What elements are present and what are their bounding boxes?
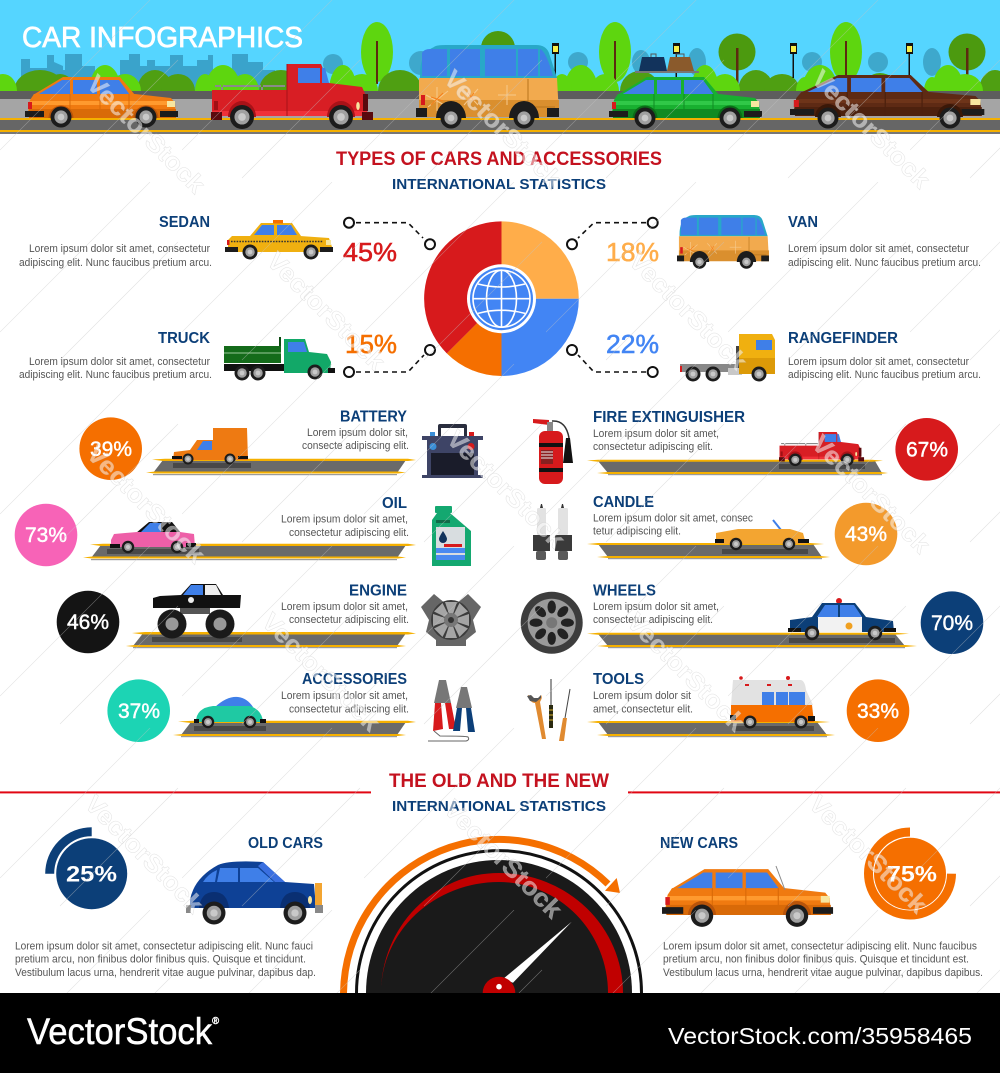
connectors [344,218,658,377]
percent: 22: 22% [606,329,659,359]
car: red pickup [779,432,864,466]
text: OIL [382,495,407,512]
panel: sedan text: adipiscing elit. Nunc faucibus pretium arcu. [19,257,212,269]
text: Lorem ipsum dolor sit amet, [593,428,719,440]
percent circle [57,591,119,653]
car: red pickup [211,64,373,129]
text: tetur adipiscing elit. [593,526,681,538]
footer bar [0,993,1000,1073]
panel: van text [788,214,981,269]
pie chart [424,221,579,376]
percent circle: 37% [118,700,160,723]
panel: truck text: TRUCK [158,330,210,347]
subheading: statistics: INTERNATIONAL STATISTICS [392,798,606,815]
car: van icon [677,215,769,269]
gauge: 25 percent: 25% [66,862,117,887]
trees [361,22,986,84]
title: CAR INFOGRAPHICS [22,22,303,54]
car: camper van [416,45,559,128]
panel: truck text: Lorem ipsum dolor sit amet, consectetur [29,356,210,368]
text: consectetur adipiscing elit. [289,527,409,539]
percent circle: 70% [931,612,973,635]
street lamps [552,43,913,78]
text block: new cars: Vestibulum lacus urna, hendrerit vitae augue pulvinar, dapibus dapibus. [663,967,983,979]
percent circle [921,591,983,654]
text: Lorem ipsum dolor sit, [307,427,408,439]
row: battery [79,409,483,480]
text: ACCESSORIES [302,671,407,688]
road [587,460,888,475]
percent: 45: 45% [343,237,397,267]
hub [483,977,515,993]
panel: sedan text: SEDAN [159,214,210,231]
panel: rangefinder text: RANGEFINDER [788,330,898,347]
text [593,494,753,538]
text block: old cars: Vestibulum lacus urna, hendrerit vitae augue pulvinar, dapibus dap. [15,967,316,979]
row: engine [57,583,481,653]
panel: van text: adipiscing elit. Nunc faucibus pretium arcu. [788,257,981,269]
needle [503,922,572,983]
subheading: statistics: INTERNATIONAL STATISTICS [392,176,606,193]
percent circle [847,679,909,742]
bushes [16,70,1000,91]
panel: rangefinder text: adipiscing elit. Nunc faucibus pretium arcu. [788,369,981,381]
icon: engine [421,594,481,646]
text [281,583,409,626]
car: monster truck [153,584,241,638]
gauge: 75 percent [869,832,952,915]
road [173,721,416,737]
car: green wagon with luggage [609,54,762,128]
heading: new cars: NEW CARS [660,835,738,852]
text: Lorem ipsum dolor sit [593,690,691,702]
panel: truck text: adipiscing elit. Nunc faucibus pretium arcu. [19,369,212,381]
footer logo: ® [212,1016,220,1027]
watermark: VectorStock [806,65,935,194]
watermark: VectorStock [806,430,935,559]
text: amet, consectetur elit. [593,704,693,716]
car: new orange wagon [662,866,833,927]
text block: old cars [15,940,316,979]
text: TOOLS [593,671,644,688]
text block: new cars: Lorem ipsum dolor sit amet, consectetur adipiscing elit. Nunc faucibus [663,940,977,952]
percent circle [895,418,958,481]
watermark: VectorStock [81,440,210,569]
car: green truck [224,337,335,380]
percent: 18: 18% [606,237,659,267]
watermark: VectorStock [803,790,932,919]
percent circle: 43% [845,523,887,546]
footer logo: VectorStock [27,1011,224,1052]
road [587,633,917,648]
text: FIRE EXTINGUISHER [593,409,745,426]
text: consectetur adipiscing elit. [593,614,713,626]
percent circle: 67% [906,438,948,462]
text block: old cars: Lorem ipsum dolor sit amet, consectetur adipiscing elit. Nunc fauci [15,940,313,952]
text block: old cars: pretium arcu, non finibus dolor finibus quis. Quisque et tincidunt. [15,954,306,966]
car: old blue car [186,861,323,924]
text: WHEELS [593,583,656,600]
text: Lorem ipsum dolor sit amet, [593,601,719,613]
heading: old and new: THE OLD AND THE NEW [389,770,610,792]
text: consecte adipiscing elit. [302,440,409,452]
car: police [788,598,896,640]
text [593,671,693,716]
gauge: 75 percent: 75% [887,862,937,887]
car: orange wagon [25,77,178,128]
text [593,583,719,626]
text: consectetur adipiscing elit. [593,441,713,453]
icon: spark plugs [533,504,572,560]
road [0,91,1000,134]
car: ambulance [730,676,815,728]
row: oil [15,495,471,566]
icon: wheel [521,592,583,654]
speedometer [344,839,642,993]
row: wheels [521,583,983,654]
watermark: VectorStock [438,65,567,194]
icon: wrench and screwdrivers [527,679,570,741]
header banner scene [0,0,1000,134]
text: consectetur adipiscing elit. [289,614,409,626]
road [126,632,416,648]
text: consectetur adipiscing elit. [289,704,409,716]
text: Lorem ipsum dolor sit amet, consec [593,513,753,525]
arrow [344,839,620,993]
text: BATTERY [340,409,407,426]
percent: 15: 15% [345,329,397,359]
percent circle: 73% [25,524,67,547]
car: orange van [172,428,248,464]
divider lines [0,791,1000,793]
percent circle [835,503,897,565]
percent circle [107,679,170,742]
text [281,671,409,716]
text: Lorem ipsum dolor sit amet, [281,601,408,613]
panel: rangefinder text: Lorem ipsum dolor sit amet, consectetur [788,356,969,368]
watermark: VectorStock [261,247,390,376]
car: pink coupe [110,522,196,553]
text: Lorem ipsum dolor sit amet, [281,513,408,525]
text: CANDLE [593,494,654,511]
icon: jumper cables [428,680,475,741]
car: semi truck [680,334,775,382]
text: ENGINE [349,583,407,600]
panel: rangefinder text [788,330,981,381]
text [281,495,409,539]
gauge: 25 percent [50,832,127,909]
road [587,721,835,737]
road [83,544,416,560]
text [302,409,409,452]
percent circle: 33% [857,700,899,723]
panel: sedan text [19,214,212,269]
text block: new cars [663,940,983,979]
icon: fire extinguisher [533,419,573,484]
watermark [79,65,935,924]
car: brown limousine [790,75,984,128]
text block: new cars: pretium arcu, non finibus dolor finibus quis. Quisque et tincidunt est. [663,954,969,966]
row: fire extinguisher [533,409,958,484]
car: green beetle [194,697,266,728]
icon: globe [467,264,536,333]
icon: battery [422,424,483,478]
heading: types of cars: TYPES OF CARS AND ACCESSORIES [336,148,662,170]
row: accessories [107,671,475,742]
row: tools [527,671,909,742]
text: Lorem ipsum dolor sit amet, [281,690,408,702]
watermark: VectorStock [438,795,567,924]
car: yellow convertible [715,520,809,550]
panel: sedan text: Lorem ipsum dolor sit amet, consectetur [29,243,210,255]
heading: old cars: OLD CARS [248,835,323,852]
watermark: VectorStock [441,425,570,554]
percent circle [79,417,142,480]
row: candle [533,494,897,565]
percent circle: 39% [90,438,132,461]
icon: oil can [432,506,471,566]
watermark: VectorStock [79,790,208,919]
text [593,409,745,453]
panel: van text: VAN [788,214,818,231]
watermark: VectorStock [621,608,750,737]
watermark: VectorStock [81,70,210,199]
car: taxi [225,220,333,260]
watermark: VectorStock [256,608,385,737]
percent circle: 46% [67,611,109,634]
road [146,459,416,475]
city skyline [21,54,275,91]
watermark: VectorStock [623,247,752,376]
panel: truck text [19,330,212,381]
percent circle [15,504,77,566]
panel: van text: Lorem ipsum dolor sit amet, consectetur [788,243,969,255]
road [587,543,830,559]
footer url: VectorStock.com/35958465 [668,1023,972,1049]
